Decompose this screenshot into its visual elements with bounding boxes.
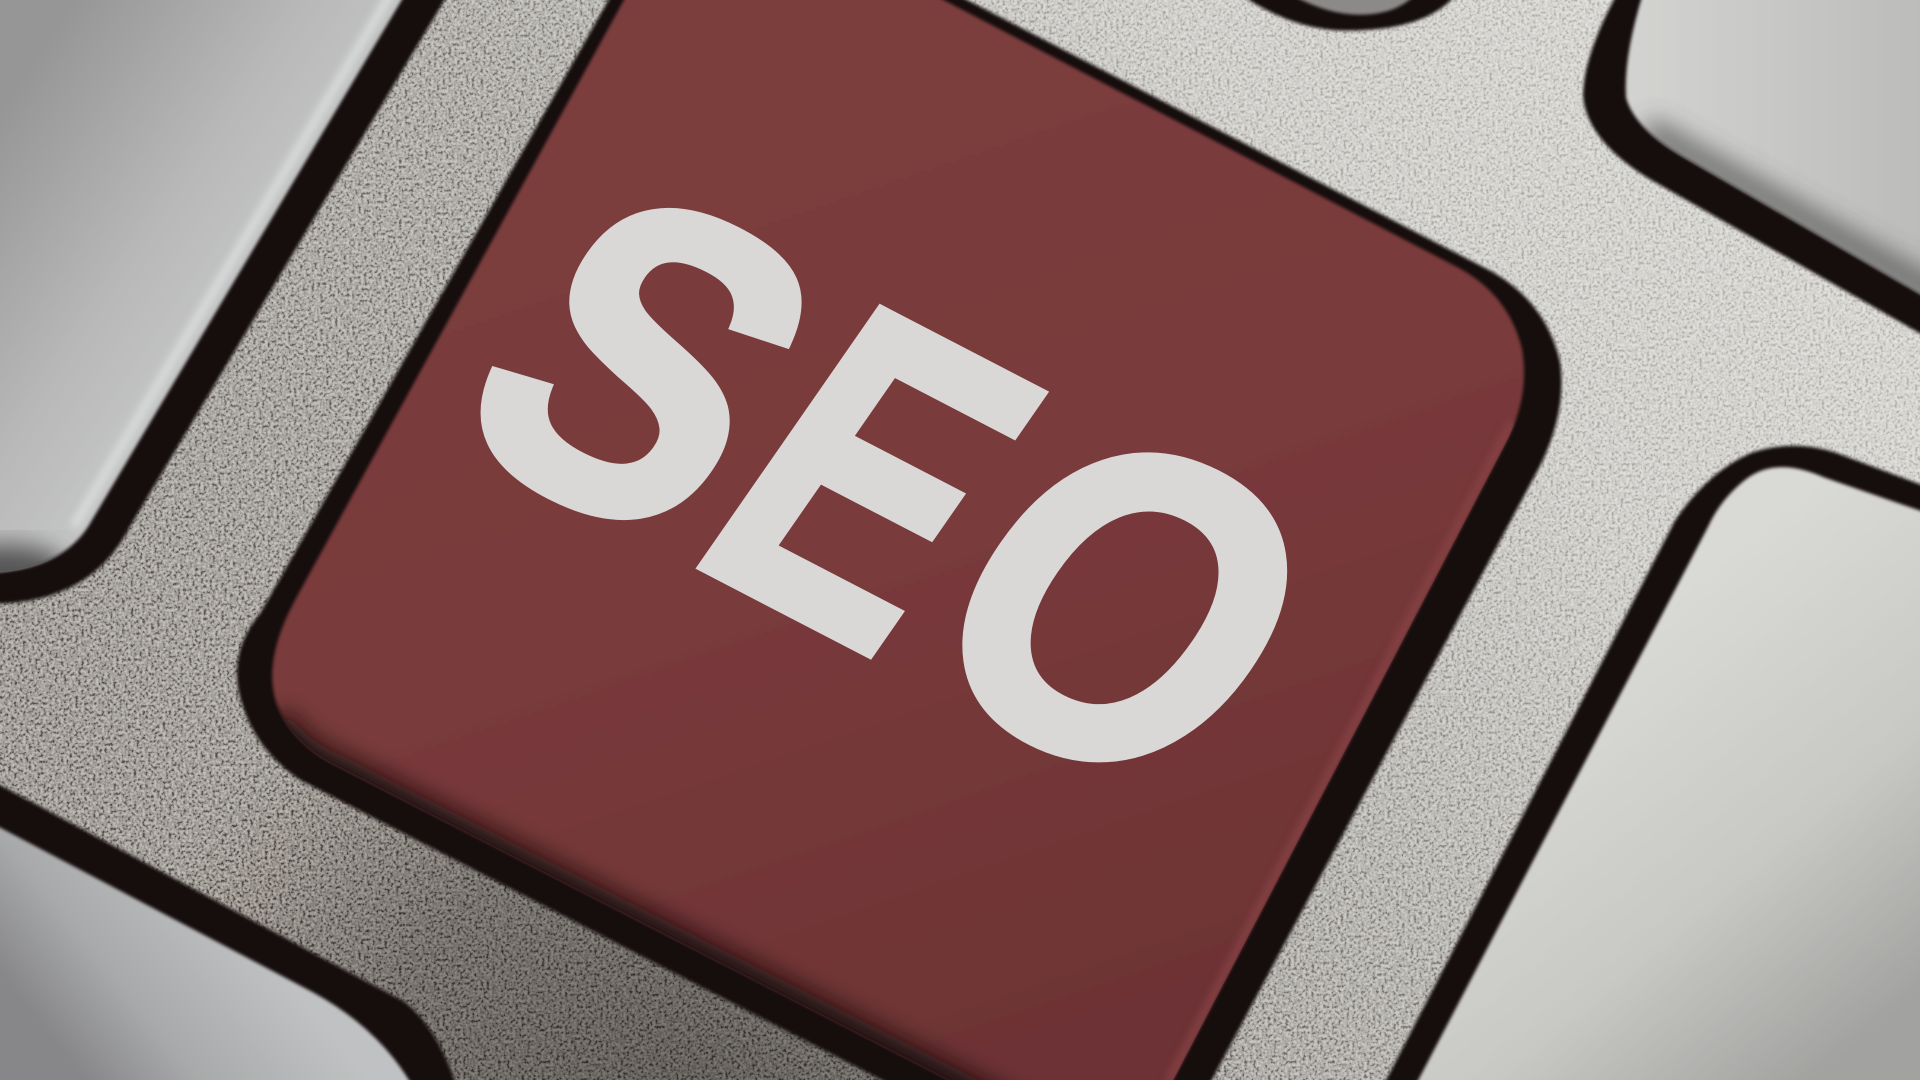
key label: SEO: E	[625, 217, 1118, 741]
key: bottom left	[0, 765, 465, 1080]
key: top centre	[1237, 0, 1463, 31]
key cap	[272, 0, 1524, 1080]
key: red SEO key	[237, 0, 1562, 1080]
key: top right	[1583, 0, 1920, 370]
key well shadow	[237, 0, 1562, 1080]
key: top left	[0, 0, 467, 604]
key label: SEO: O	[843, 327, 1407, 888]
key label: SEO	[382, 94, 1407, 888]
key label: SEO: S	[382, 94, 905, 632]
key: bottom right	[1365, 446, 1920, 1080]
